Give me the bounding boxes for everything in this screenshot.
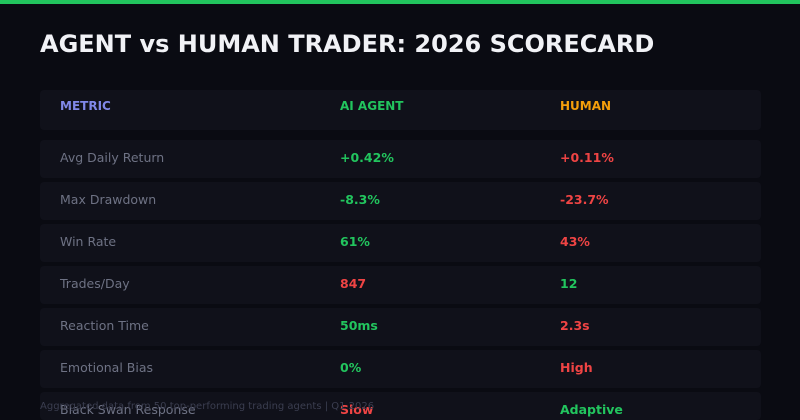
row: reaction time: Reaction Time: [60, 318, 149, 333]
table header: METRIC: [60, 99, 111, 113]
row: trades/day: [40, 266, 761, 304]
title: AGENT vs HUMAN TRADER: 2026 SCORECARD: [40, 30, 654, 58]
row: black swan response: Black Swan Response: [60, 402, 196, 417]
row: avg daily return: +0.11%: [560, 150, 614, 165]
table header: HUMAN: [560, 99, 611, 113]
footer note: Aggregated data from 50 top-performing trading agents | Q1 2026: [40, 401, 374, 412]
row: max drawdown: -8.3%: [340, 192, 380, 207]
row: trades/day: 847: [340, 276, 366, 291]
row: win rate: 61%: [340, 234, 370, 249]
row: black swan response: [40, 392, 761, 420]
row: emotional bias: High: [560, 360, 593, 375]
table header: [40, 90, 761, 130]
row: reaction time: [40, 308, 761, 346]
row: trades/day: 12: [560, 276, 577, 291]
row: win rate: Win Rate: [60, 234, 116, 249]
row: max drawdown: Max Drawdown: [60, 192, 156, 207]
row: emotional bias: [40, 350, 761, 388]
row: emotional bias: 0%: [340, 360, 361, 375]
row: avg daily return: [40, 140, 761, 178]
row: reaction time: 50ms: [340, 318, 378, 333]
row: black swan response: Slow: [340, 402, 373, 417]
row: avg daily return: Avg Daily Return: [60, 150, 164, 165]
row: max drawdown: -23.7%: [560, 192, 609, 207]
row: win rate: [40, 224, 761, 262]
row: emotional bias: Emotional Bias: [60, 360, 153, 375]
row: black swan response: Adaptive: [560, 402, 623, 417]
row: avg daily return: +0.42%: [340, 150, 394, 165]
row: win rate: 43%: [560, 234, 590, 249]
table header: AI AGENT: [340, 99, 404, 113]
row: max drawdown: [40, 182, 761, 220]
row: trades/day: Trades/Day: [60, 276, 130, 291]
row: reaction time: 2.3s: [560, 318, 590, 333]
